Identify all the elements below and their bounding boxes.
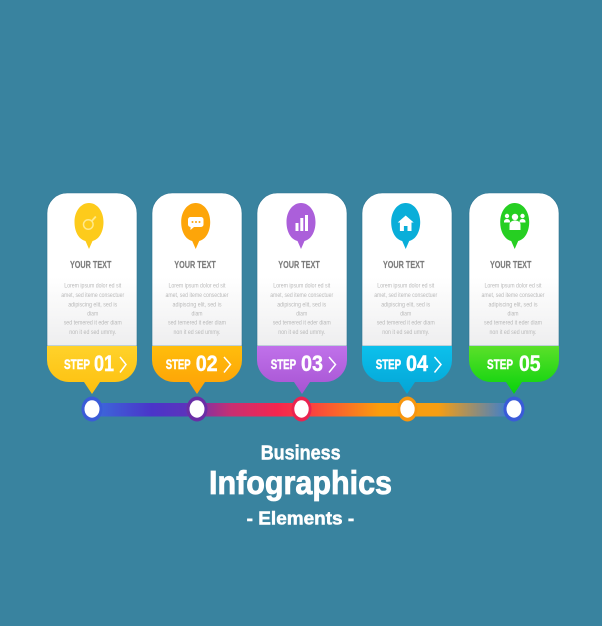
timeline node 3 xyxy=(292,396,312,422)
body text xyxy=(61,283,125,336)
title: Business xyxy=(261,442,341,464)
step label xyxy=(376,351,429,376)
body text: Lorem ipsum dolor ed sit xyxy=(377,283,434,290)
body text: adipiscing elit, sed is xyxy=(277,301,327,308)
body text: non it ed sed ummy. xyxy=(382,329,429,336)
step label xyxy=(64,351,114,376)
step label xyxy=(271,351,323,376)
arrow xyxy=(434,357,441,372)
icon: speech bubble pin xyxy=(181,203,210,249)
body text: non it ed sed ummy. xyxy=(278,329,325,336)
body text: diam xyxy=(296,310,307,317)
body text xyxy=(166,283,229,336)
panel: step 5 xyxy=(469,193,559,394)
body text: sed temered it eder diam xyxy=(484,320,542,327)
body text: sed temered it eder diam xyxy=(377,320,435,327)
heading: YOUR TEXT xyxy=(383,260,424,271)
timeline node 5 xyxy=(504,396,524,422)
body text: Lorem ipsum dolor ed sit xyxy=(273,283,330,290)
body text: adipiscing elit, sed is xyxy=(172,301,222,308)
body text: adipiscing elit, sed is xyxy=(488,301,538,308)
step label xyxy=(166,351,218,376)
card body xyxy=(469,193,559,346)
step label: 01 xyxy=(94,351,114,376)
body text xyxy=(270,283,334,336)
arrow xyxy=(329,357,336,372)
icon: magnifier pin xyxy=(74,203,104,249)
panel: step 1 xyxy=(47,193,137,394)
step label: 03 xyxy=(301,351,323,376)
heading: YOUR TEXT xyxy=(174,260,216,271)
title: - Elements - xyxy=(247,508,354,528)
step label: STEP xyxy=(64,356,90,372)
step label xyxy=(487,351,540,376)
step label: STEP xyxy=(166,356,191,372)
icon: bar chart pin xyxy=(286,203,316,249)
body text: diam xyxy=(508,310,519,317)
body text: non it ed sed ummy. xyxy=(490,329,537,336)
card body xyxy=(362,193,452,346)
panel: step 3 xyxy=(257,193,347,394)
body text: amet, sed iteme consectuer xyxy=(482,292,545,299)
step label: 04 xyxy=(406,351,429,376)
body text: sed temered it eder diam xyxy=(168,320,226,327)
timeline node 4 xyxy=(398,396,418,422)
body text xyxy=(482,283,545,336)
timeline node 1 xyxy=(82,396,102,422)
card body xyxy=(152,193,242,346)
timeline node 2 xyxy=(186,396,208,422)
icon: people pin xyxy=(500,203,529,249)
step band xyxy=(469,346,559,394)
arrow xyxy=(120,357,126,372)
step band xyxy=(257,346,347,394)
heading: YOUR TEXT xyxy=(278,260,320,271)
card body xyxy=(47,193,137,346)
body text: Lorem ipsum dolor ed sit xyxy=(484,283,542,290)
body text: amet, sed iteme consectuer xyxy=(61,292,125,299)
body text: Lorem ipsum dolor ed sit xyxy=(168,283,226,290)
body text: amet, sed iteme consectuer xyxy=(270,292,334,299)
body text: amet, sed iteme consectuer xyxy=(374,292,438,299)
step label: STEP xyxy=(271,356,296,372)
step label: 05 xyxy=(519,351,540,376)
title xyxy=(209,442,392,528)
body text: non it ed sed ummy. xyxy=(174,329,221,336)
body text: non it ed sed ummy. xyxy=(69,329,116,336)
title: Infographics xyxy=(209,464,392,501)
body text: adipiscing elit, sed is xyxy=(381,301,431,308)
body text xyxy=(374,283,438,336)
timeline bar xyxy=(82,396,524,422)
heading: YOUR TEXT xyxy=(70,260,111,271)
card body xyxy=(257,193,347,346)
heading: YOUR TEXT xyxy=(490,260,531,271)
body text: sed temered it eder diam xyxy=(64,320,122,327)
step band xyxy=(47,346,137,394)
step band xyxy=(362,346,452,394)
step label: STEP xyxy=(487,356,513,372)
body text: diam xyxy=(192,310,203,317)
icon: house pin xyxy=(391,203,420,249)
step band xyxy=(152,346,242,394)
body text: diam xyxy=(87,310,98,317)
step label: 02 xyxy=(196,351,218,376)
step label: STEP xyxy=(376,356,401,372)
panel: step 2 xyxy=(152,193,242,394)
body text: amet, sed iteme consectuer xyxy=(166,292,229,299)
body text: Lorem ipsum dolor ed sit xyxy=(64,283,121,290)
arrow xyxy=(224,357,230,372)
body text: sed temered it eder diam xyxy=(273,320,331,327)
body text: adipiscing elit, sed is xyxy=(68,301,118,308)
panel: step 4 xyxy=(362,193,452,394)
body text: diam xyxy=(400,310,411,317)
